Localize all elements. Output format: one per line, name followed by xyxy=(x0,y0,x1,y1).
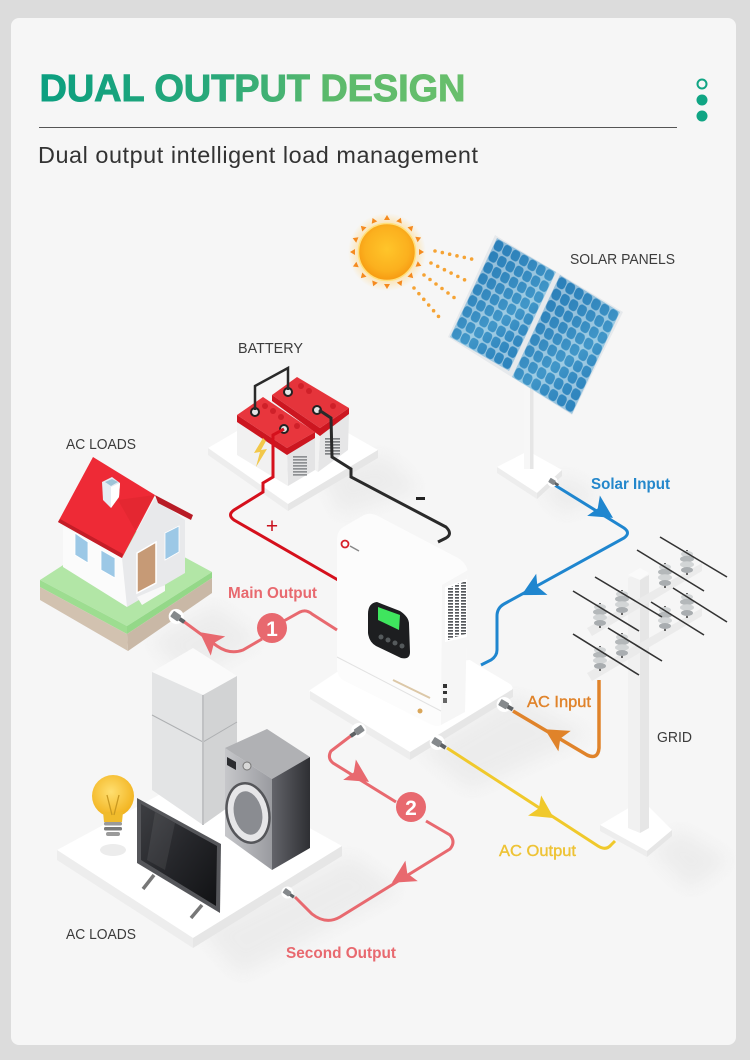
connector: second output top xyxy=(346,720,369,742)
heading rule xyxy=(39,127,677,128)
battery top caps xyxy=(262,383,336,429)
cable: solar input xyxy=(481,484,628,665)
panel frame xyxy=(448,235,623,415)
label: grid: GRID xyxy=(657,730,692,746)
inverter branding xyxy=(393,680,447,714)
connector: solar xyxy=(545,474,561,490)
symbol: minus xyxy=(416,497,425,500)
label: AC loads (house): AC LOADS xyxy=(66,437,136,453)
connector: main output xyxy=(166,606,189,628)
label: solar input: Solar Input xyxy=(591,476,671,493)
house step xyxy=(137,585,165,605)
soft floor shadows xyxy=(150,455,730,975)
inverter xyxy=(310,514,513,760)
cable: main output xyxy=(183,611,337,656)
pole shaft xyxy=(628,568,649,833)
icon: sun xyxy=(348,213,476,317)
label: AC output: AC Output xyxy=(499,843,577,860)
cable: second output xyxy=(295,735,453,920)
inverter vent xyxy=(445,579,467,642)
connector: AC input xyxy=(494,694,517,716)
grid pole xyxy=(573,537,727,857)
inverter platform xyxy=(310,660,513,760)
pole crossarms xyxy=(587,563,702,681)
label: second output: Second Output xyxy=(286,945,397,962)
battery jumper cable xyxy=(255,368,288,410)
house xyxy=(40,457,212,651)
battery platform xyxy=(208,400,378,511)
power lines xyxy=(573,537,727,675)
solar panels xyxy=(448,235,623,499)
badge: 1 xyxy=(257,613,287,643)
cable: battery negative xyxy=(319,410,450,542)
battery group xyxy=(208,368,378,511)
battery: front xyxy=(237,397,315,486)
symbol: plus: + xyxy=(266,515,278,538)
house chimney xyxy=(102,477,120,508)
cable: AC input xyxy=(513,680,599,756)
label: AC input: AC Input xyxy=(527,694,592,711)
appliances platform xyxy=(57,770,342,948)
icon: light bulb xyxy=(92,775,134,856)
label: AC loads (appliances): AC LOADS xyxy=(66,927,136,943)
fridge xyxy=(152,648,237,825)
cable: AC output xyxy=(447,748,615,848)
label: solar panels: SOLAR PANELS xyxy=(570,252,675,268)
house roof xyxy=(58,457,193,558)
inverter logo xyxy=(342,540,359,551)
label: battery: BATTERY xyxy=(238,341,303,357)
inverter LCD xyxy=(378,607,400,630)
washing machine xyxy=(221,729,310,870)
pole base xyxy=(600,800,672,857)
subtitle: Dual output intelligent load management xyxy=(38,142,478,168)
inverter body xyxy=(337,514,468,726)
badge: 2 xyxy=(396,792,426,822)
television xyxy=(137,798,221,918)
battery: rear xyxy=(272,377,349,472)
badge: 1: 1 xyxy=(266,618,278,641)
panel module: right xyxy=(512,275,620,414)
label: main output: Main Output xyxy=(228,585,318,602)
house walls xyxy=(63,498,185,607)
house windows xyxy=(75,526,179,578)
battery terminals xyxy=(251,388,321,433)
title: DUAL OUTPUT DESIGN xyxy=(40,68,466,110)
badge: 2: 2 xyxy=(405,797,417,820)
connector: second output bottom xyxy=(279,884,297,902)
panel module: left xyxy=(450,238,556,371)
connector: AC output xyxy=(427,732,450,754)
inverter buttons xyxy=(378,634,404,648)
inverter control panel xyxy=(368,602,410,658)
panel stand xyxy=(497,385,562,499)
house door xyxy=(137,542,156,593)
insulators xyxy=(593,550,694,671)
cable: battery positive xyxy=(230,429,338,580)
house ground xyxy=(40,525,212,651)
decorative status dots xyxy=(696,80,708,122)
